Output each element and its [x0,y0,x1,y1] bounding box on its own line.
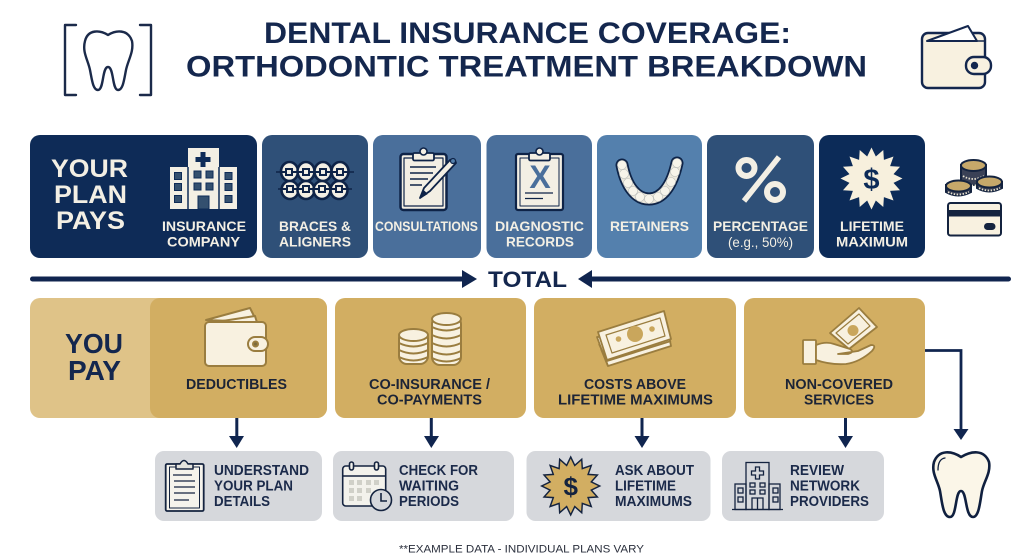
icon: hand holding cash [803,308,877,364]
label: insurance company: COMPANY [167,234,241,250]
label: diagnostic records [495,218,584,250]
arrow: services down [838,418,853,448]
icon: tooth in brackets [65,25,151,95]
label: percentage: (e.g., 50%) [728,234,793,250]
panel: ask about lifetime maximums [526,451,710,521]
icon: percent sign [738,157,783,201]
label: non-covered services: NON-COVERED [785,377,893,393]
label: understand your plan details: YOUR PLAN [214,478,293,494]
label: check for waiting periods: PERIODS [399,494,459,510]
label: check for waiting periods [399,463,478,510]
label: non-covered services: SERVICES [804,392,874,408]
label: check for waiting periods: WAITING [399,478,459,494]
label: costs above lifetime maximums: COSTS ABOVE [584,377,686,393]
heading: your plan pays: PLAN [54,181,127,209]
footnote: **EXAMPLE DATA - INDIVIDUAL PLANS VARY [399,544,645,556]
heading: you pay: YOU [65,328,123,359]
label: consultations: CONSULTATIONS [375,218,478,234]
arrow: lifetime down [634,418,650,448]
panel: consultations [373,135,481,258]
panel: braces and aligners [262,135,368,258]
label: co-insurance / co-payments: CO-INSURANCE / [369,377,490,393]
label: non-covered services [785,377,893,408]
label: co-insurance / co-payments: CO-PAYMENTS [377,392,482,408]
label: review network providers [790,463,869,510]
panel: review network providers [722,451,884,521]
label: ask about lifetime maximums: ASK ABOUT [615,463,694,479]
icon: coin stacks [399,313,461,365]
icon: braces [276,162,354,199]
label: costs above lifetime maximums [558,377,713,408]
arrow: total left [30,270,477,288]
panel: non-covered services [744,298,925,418]
heading: total: TOTAL [488,267,567,292]
label: braces and aligners [279,218,351,250]
title: ORTHODONTIC TREATMENT BREAKDOWN [186,50,867,84]
label: ask about lifetime maximums: LIFETIME [615,478,676,494]
label: understand your plan details: DETAILS [214,494,270,510]
heading: your plan pays: YOUR [51,155,128,183]
icon: clipboard with pencil [400,148,456,210]
arrow: deductibles down [229,418,244,448]
arrow: connector to tooth [925,350,968,440]
label: deductibles: DEDUCTIBLES [186,377,287,393]
panel: percentage [707,135,814,258]
icon: stack of cash [597,311,671,366]
label: lifetime maximum: LIFETIME [840,218,904,234]
heading: your plan pays [51,155,128,235]
label: co-insurance / co-payments [369,377,490,408]
icon: gold dollar starburst [542,457,600,515]
icon: calendar and clock [343,462,392,510]
panel: diagnostic records [486,135,592,258]
icon: hospital outline [732,462,783,510]
panel: check for waiting periods [333,451,514,521]
heading: your plan pays: PAYS [56,207,125,235]
label: braces and aligners: ALIGNERS [279,234,351,250]
panel: your plan pays / insurance company [30,135,257,258]
label: check for waiting periods: CHECK FOR [399,463,478,479]
panel: you pay [30,298,327,418]
panel: lifetime maximum [819,135,925,258]
label: ask about lifetime maximums: MAXIMUMS [615,494,692,510]
label: percentage: PERCENTAGE [713,218,808,234]
label: review network providers: REVIEW [790,463,844,479]
label: percentage [713,218,808,250]
icon: wallet [205,308,268,366]
label: lifetime maximum: MAXIMUM [836,234,908,250]
icon: hospital building [170,148,237,209]
label: diagnostic records: RECORDS [506,234,574,250]
heading: you pay: PAY [68,355,121,386]
label: braces and aligners: BRACES & [279,218,351,234]
icon: wallet top right [922,26,991,88]
arrow: co-insurance down [424,418,439,448]
label: costs above lifetime maximums: LIFETIME MAXIMUMS [558,392,713,408]
label: understand your plan details: UNDERSTAND [214,463,309,479]
panel: retainers [597,135,702,258]
title [186,17,867,84]
icon: retainer [618,158,682,204]
icon: gold dollar starburst: $ [563,472,578,502]
icon: clipboard document [166,460,204,511]
arrow: total right [578,270,1011,288]
label: understand your plan details [214,463,309,510]
icon: clipboard with x-ray: X [529,159,551,195]
icon: dollar starburst: $ [863,164,880,196]
label: diagnostic records: DIAGNOSTIC [495,218,584,234]
label: review network providers: PROVIDERS [790,494,869,510]
panel: co-insurance [335,298,526,418]
label: lifetime maximum [836,218,908,250]
label: retainers: RETAINERS [610,218,689,234]
panel: understand your plan details [155,451,322,521]
panel: costs above lifetime maximums [534,298,736,418]
icon: coins and credit card [946,160,1002,236]
label: ask about lifetime maximums [615,463,694,510]
label: review network providers: NETWORK [790,478,860,494]
icon: cream tooth [933,452,989,517]
heading: you pay [65,328,123,386]
title: DENTAL INSURANCE COVERAGE: [264,17,791,50]
label: insurance company [162,218,246,250]
label: insurance company: INSURANCE [162,218,246,234]
